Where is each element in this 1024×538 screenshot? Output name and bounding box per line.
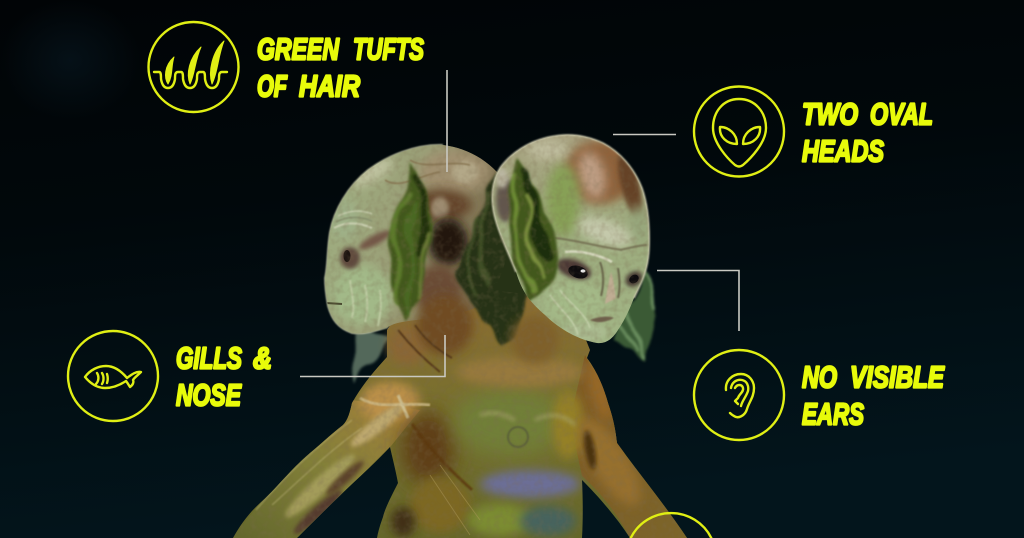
- leader line: two oval heads: [613, 134, 676, 136]
- icon: partially visible bottom circle: [631, 513, 711, 538]
- label: gills and nose: GILLS: [176, 340, 242, 376]
- callout: two oval heads: [694, 86, 933, 176]
- label: two oval heads: OVAL: [870, 96, 933, 132]
- leader line: no visible ears: [657, 270, 739, 331]
- label: no visible ears: EARS: [802, 396, 864, 432]
- icon: fish: [68, 331, 158, 421]
- alien lower hair strands: [352, 268, 655, 378]
- callout: gills and nose: [68, 331, 272, 421]
- label: green tufts of hair: TUFTS: [353, 32, 424, 66]
- icon: ear: [694, 350, 784, 440]
- label: no visible ears: NO: [802, 360, 837, 394]
- alien figure: [225, 130, 695, 538]
- icon: hair follicles: [148, 22, 238, 112]
- callout: no visible ears: [694, 350, 945, 440]
- leader line: gills and nose: [300, 335, 445, 376]
- label: green tufts of hair: OF: [257, 68, 288, 104]
- chest detail: [256, 395, 575, 535]
- right head hair: [508, 160, 554, 300]
- skin texture: [288, 136, 649, 538]
- label: two oval heads: HEADS: [802, 134, 884, 168]
- callout: green tufts of hair: [148, 22, 424, 112]
- left head: [323, 143, 498, 336]
- icon: alien head: [694, 86, 784, 176]
- neck folds: [388, 295, 473, 372]
- right head: [485, 130, 655, 350]
- leader line: green tufts: [446, 70, 448, 172]
- label: green tufts of hair: HAIR: [299, 68, 360, 104]
- alien body: [225, 280, 695, 538]
- right neck: [511, 316, 559, 364]
- left head hair: [390, 158, 431, 318]
- label: green tufts of hair: GREEN: [257, 32, 339, 66]
- label: two oval heads: TWO: [802, 96, 858, 132]
- background nebula glow: [0, 0, 140, 120]
- label: no visible ears: VISIBLE: [850, 360, 945, 394]
- label: gills and nose: &: [253, 340, 272, 376]
- hair between heads: [460, 172, 530, 342]
- label: gills and nose: NOSE: [176, 378, 242, 412]
